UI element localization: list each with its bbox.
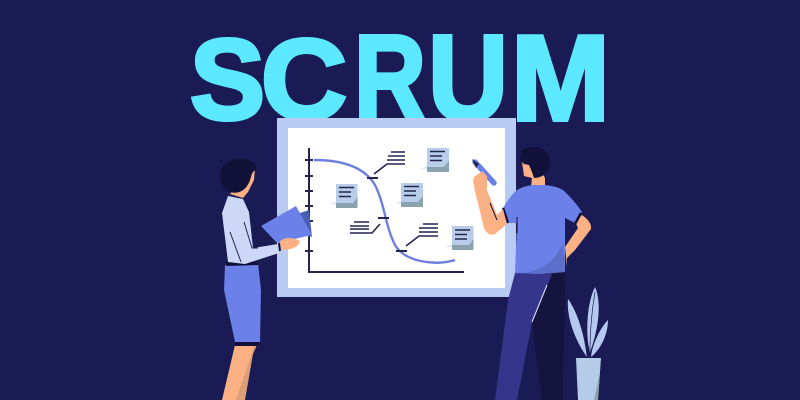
hair <box>520 147 550 178</box>
man with pen <box>472 147 591 400</box>
neck and face <box>230 165 255 198</box>
hair <box>220 159 256 193</box>
folder <box>300 210 312 237</box>
sticky note 1 <box>420 148 449 172</box>
title <box>190 10 610 146</box>
light trouser leg <box>495 273 552 400</box>
title: S <box>190 17 265 144</box>
title: U <box>428 10 508 146</box>
chart: s-curve <box>305 148 464 272</box>
right arm <box>474 187 507 235</box>
neck and face <box>522 162 545 187</box>
woman with folder <box>220 159 312 400</box>
title: C <box>261 17 347 144</box>
sticky note 2 <box>329 184 358 208</box>
front leg <box>222 345 254 400</box>
callout: lower text lines <box>406 224 438 246</box>
blouse <box>222 196 279 264</box>
panel: whiteboard <box>277 118 516 297</box>
title: M <box>511 10 610 146</box>
sticky note 4 <box>445 226 474 250</box>
vase <box>576 358 601 400</box>
plant <box>568 287 608 400</box>
dark trouser leg <box>532 272 565 400</box>
t-shirt <box>503 185 582 274</box>
sticky note 3 <box>394 183 423 207</box>
hand <box>473 171 487 189</box>
left arm on hip <box>565 215 591 267</box>
callout: upper text lines <box>374 152 405 174</box>
leaves <box>568 299 587 357</box>
title: R <box>354 10 426 146</box>
hand <box>280 238 300 250</box>
pen <box>475 162 494 183</box>
callout: left text lines <box>350 222 380 233</box>
back leg <box>236 345 257 400</box>
skirt <box>224 263 261 342</box>
